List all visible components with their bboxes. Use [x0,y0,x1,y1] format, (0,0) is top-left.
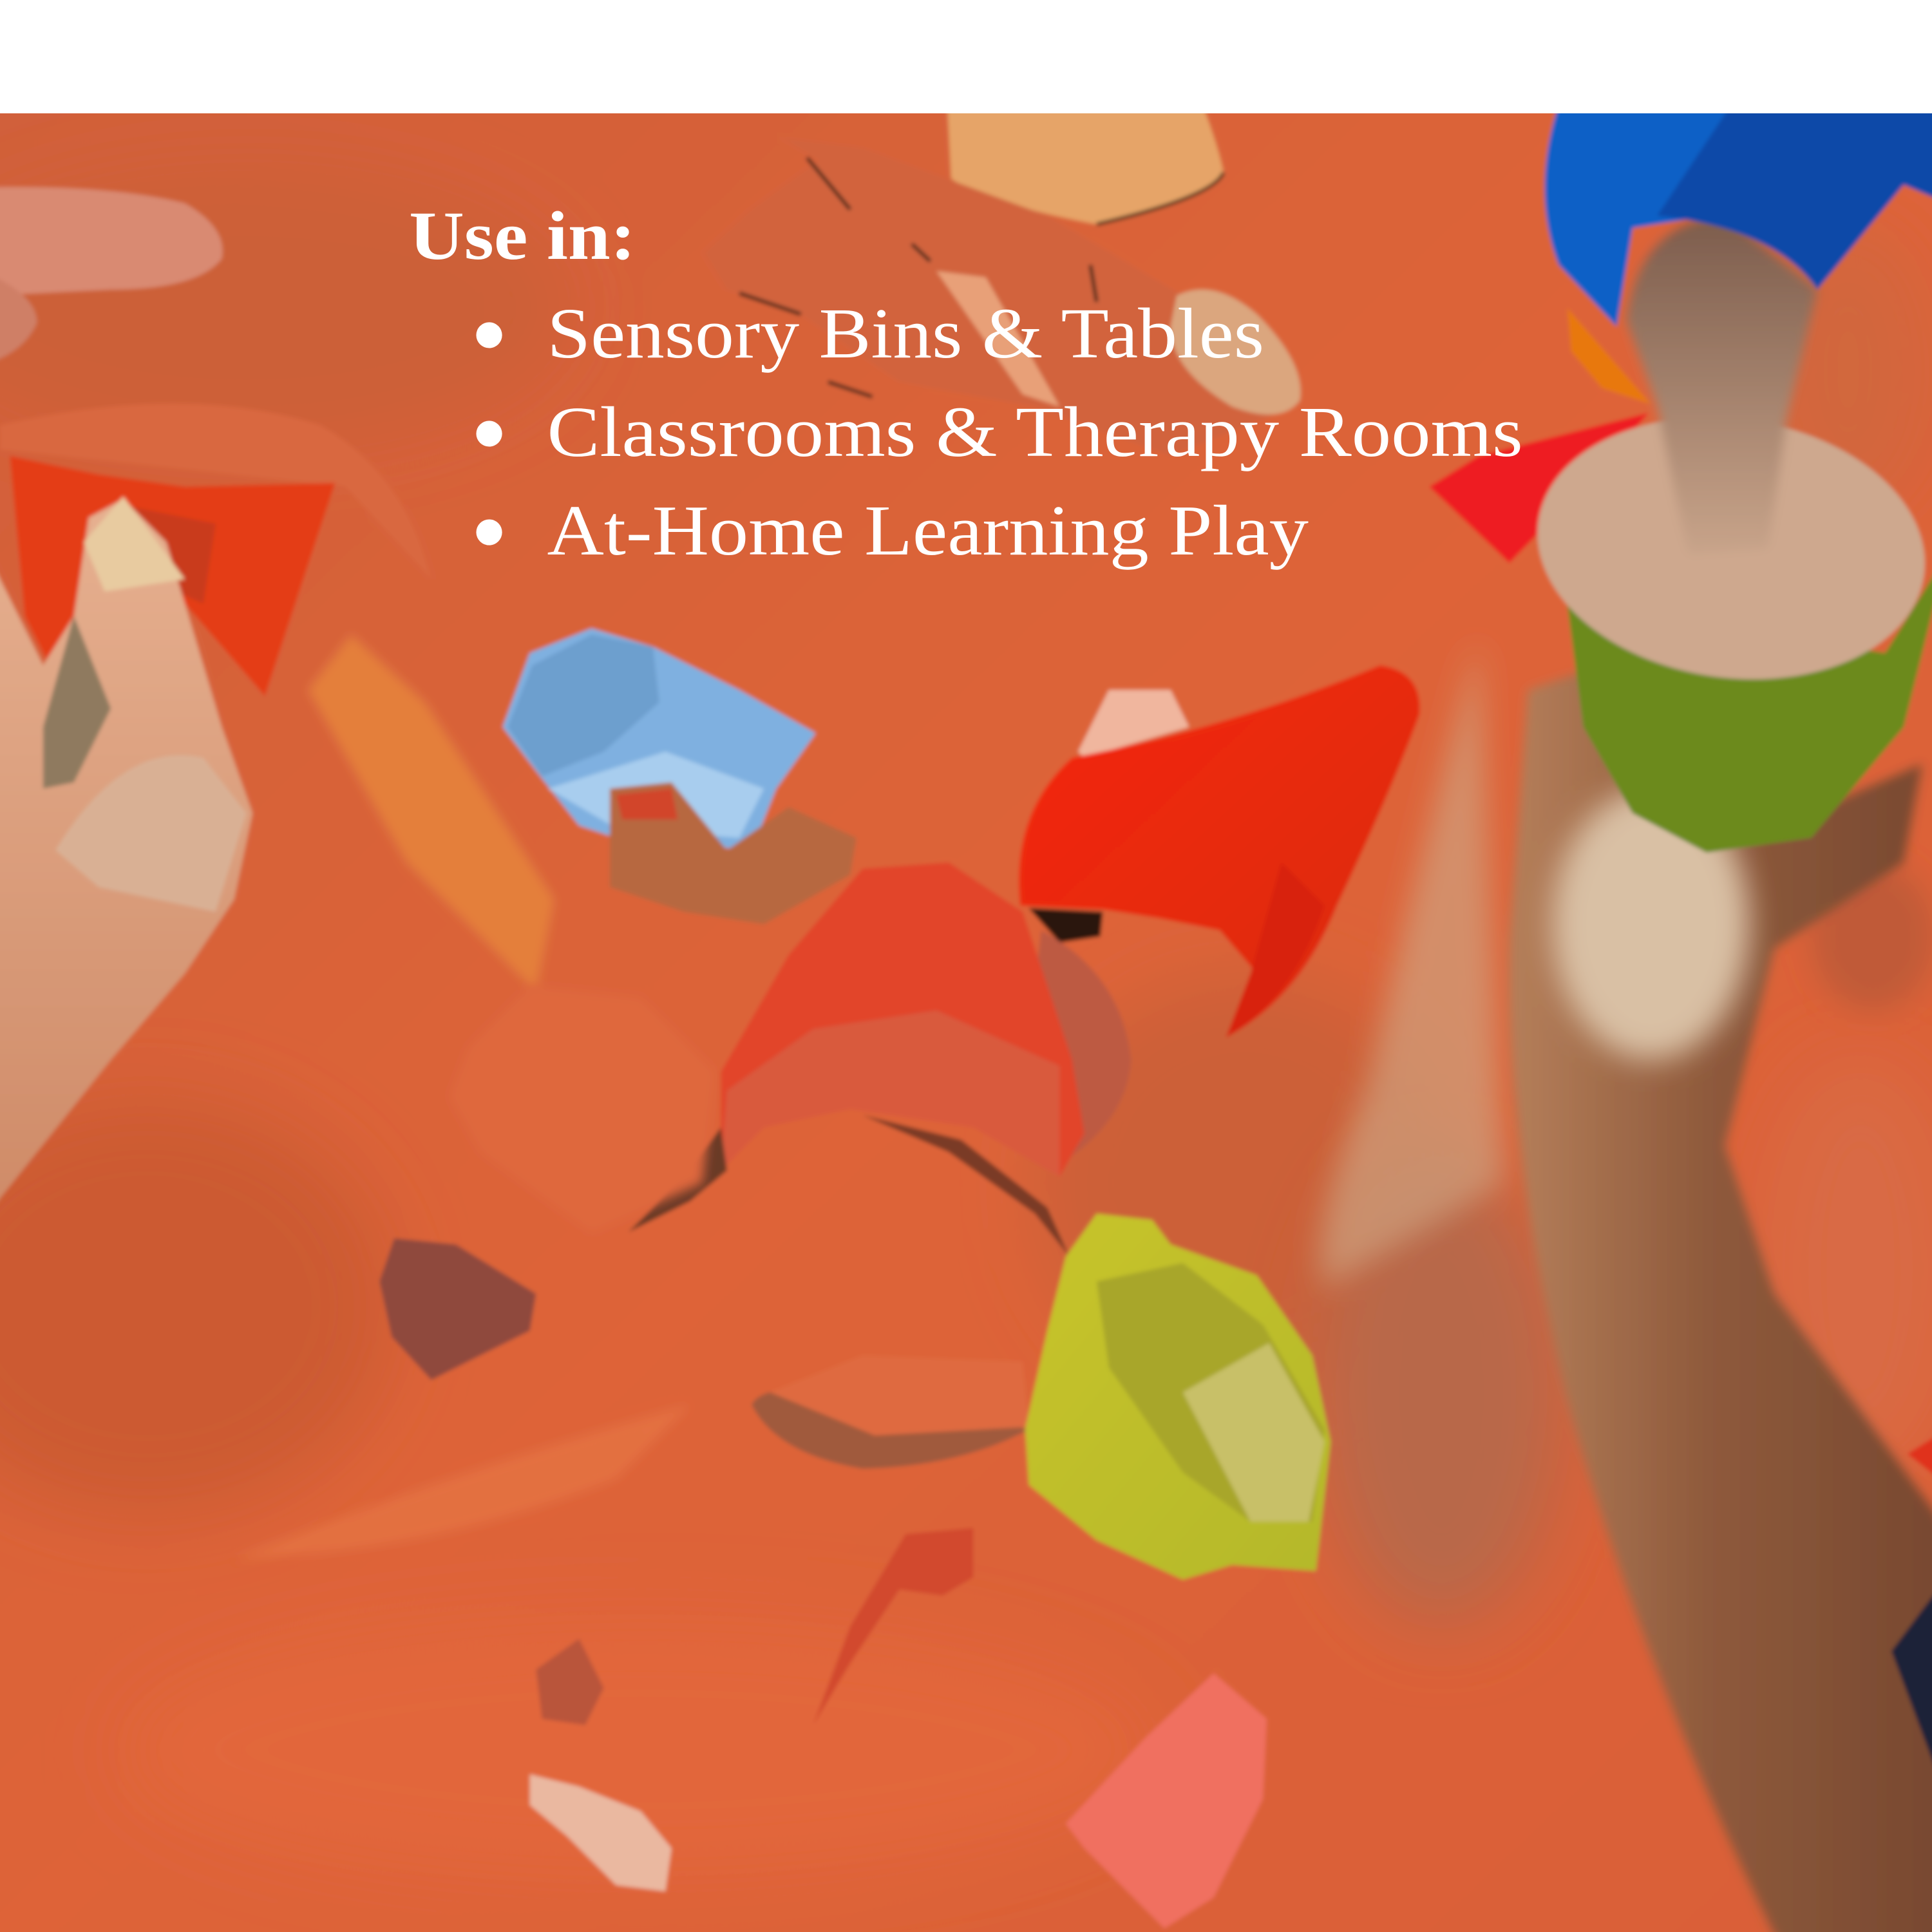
shell at top [945,113,1227,228]
orange piece [1567,308,1651,404]
white top band [0,0,1932,113]
torn sand leaf [737,155,1260,452]
red-white shell [1066,1673,1267,1928]
large red cone [1019,665,1420,1037]
pouring sand stream [1627,216,1817,554]
crab-like sand debris [610,782,857,924]
striped stone [379,1238,536,1380]
list item: sensory bins: Sensory Bins & Tables [547,294,1264,374]
child's arm [1320,641,1932,1932]
half-buried shell [752,1356,1029,1469]
heading: use in: Use in: [409,198,636,274]
blue toy [503,629,816,850]
red flake [813,1528,973,1725]
central red-orange hat toy [629,862,1131,1257]
red cup at left [9,404,335,696]
sand mound [450,986,715,1232]
text block: use in list [409,198,1523,571]
beige shell right of leaf [1171,290,1301,415]
small red toy at right edge [1908,1429,1932,1484]
list item: at-home: At-Home Learning Play [547,491,1309,571]
left hand, fingers and forearm [0,187,252,1214]
sand dimple [536,1639,604,1725]
white shell fragment [530,1774,672,1891]
red cup behind arm [1429,413,1649,563]
lime green cup [1025,1214,1331,1580]
sand smear [234,1405,690,1558]
blue bucket [1545,86,1932,327]
green cup filled with sand [1520,393,1932,853]
list item: classrooms: Classrooms & Therapy Rooms [547,393,1523,472]
sand mound orange stripe [308,634,554,992]
